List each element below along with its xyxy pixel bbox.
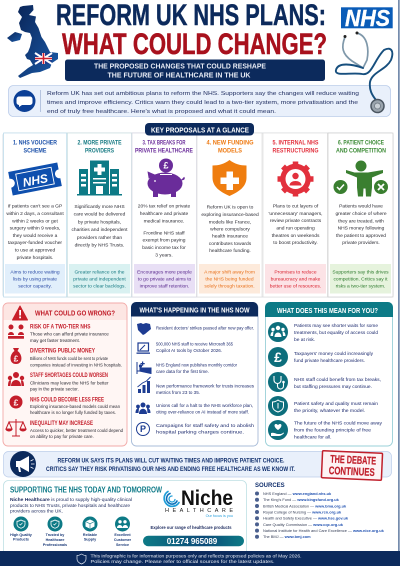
- item: free healthcare: healthcare for all.: [294, 434, 332, 440]
- footer text: Policies may change. Please refer to official sources for the latest updates.: [90, 559, 274, 564]
- callout: lists by using private: [13, 276, 57, 282]
- stamp: the debate continues: [321, 451, 383, 480]
- callout: [199, 264, 260, 294]
- icon: high quality: [10, 516, 33, 542]
- card 3: tax breaks: medical insurance.: [144, 218, 184, 224]
- panel: sources: Care Quality Commission — www.cqc.org.uk: [263, 522, 344, 527]
- subtitle banner: [65, 60, 325, 81]
- item: unions: Unions call for a halt to the NHS workforce plan,: [156, 403, 253, 408]
- item: staff shortages: STAFF SHORTAGES COULD WORSEN: [30, 373, 108, 379]
- icon: customer service: Service: [116, 543, 129, 547]
- item: money: Taxpayers' money could increasingly: [294, 351, 374, 357]
- icon: reliable supply: Reliable: [83, 533, 97, 537]
- card 3: tax breaks: healthcare and private: [140, 211, 188, 217]
- icon: NHS ticket: [8, 162, 62, 196]
- icon: trusted: [43, 516, 67, 547]
- card 6: patient choice: [328, 133, 393, 297]
- body text: Niche Healthcare is proud to supply high-quality clinical: [10, 497, 132, 502]
- icon: piggy bank with pound: £: [163, 160, 169, 170]
- item: performance framework: [138, 377, 255, 395]
- item: safety: [268, 396, 378, 416]
- text: CRITICS SAY THEY RISK PRIVATISING OUR NHS AND ENDING FREE HEALTHCARE AS WE KNOW IT.: [46, 466, 295, 473]
- callout: solely through taxation.: [204, 284, 255, 290]
- callout: competition. Critics say it: [333, 276, 388, 282]
- card 3: tax breaks: Frontline NHS staff: [143, 230, 185, 236]
- card 4: funding models: Reform UK is open to: [207, 205, 254, 211]
- phone pill: 01274 965089: [167, 537, 218, 546]
- footer text: [90, 554, 302, 564]
- card 5: restructuring: 'unnecessary' managers,: [268, 211, 323, 217]
- icon: hospital: [77, 160, 122, 196]
- item: public money: companies instead of investing in NHS hospitals.: [30, 362, 122, 368]
- item: performance framework: metrics from 23 to 35.: [156, 390, 200, 395]
- callout: better use of resources.: [270, 284, 321, 290]
- item: staff shortages: [8, 372, 109, 392]
- logo: Niche Healthcare: HEALTHCARE: [165, 508, 233, 514]
- callout: sector to clear backlogs.: [73, 284, 126, 290]
- item: inequality: [6, 419, 123, 439]
- intro text: Reform UK has set out ambitious plans to reform the NHS. Supporters say the changes will reduce waiting: [47, 91, 359, 97]
- item: public money: [11, 348, 122, 368]
- item: parking: P: [140, 424, 146, 434]
- item: less free: Exploring insurance-based models could mean: [30, 404, 120, 409]
- item: Copilot: Copilot AI tools by October 2026.: [156, 348, 222, 353]
- item: two tier: may get faster treatment.: [30, 338, 80, 343]
- item: performance framework: New performance framework for trusts increases: [156, 383, 255, 388]
- panel: sources: NHS England — www.england.nhs.uk: [263, 491, 332, 496]
- stamp: the debate continues: CONTINUES: [328, 465, 375, 479]
- item: free healthcare: from the founding principle of free: [294, 428, 371, 434]
- item: waits: treatments, but equality of access could: [294, 330, 378, 336]
- card 3: tax breaks: 3 years.: [155, 252, 173, 258]
- icon: person with tick and cross: [334, 160, 388, 196]
- card 1: NHS voucher: If patients can't see a GP: [8, 204, 62, 210]
- item: free healthcare: The future of the NHS could move away: [294, 420, 383, 426]
- card 5: restructuring: and run operating: [276, 226, 315, 232]
- card 1: NHS voucher: taxpayer-funded voucher: [8, 240, 62, 246]
- item: Copilot: [136, 342, 233, 354]
- icon: reliable supply: [82, 516, 98, 542]
- callout: private and independent: [73, 276, 126, 282]
- callout: Aims to reduce waiting: [10, 270, 60, 276]
- card 4: funding models: exploring insurance-based: [201, 212, 259, 218]
- heading: key proposals pill: [145, 123, 254, 136]
- item: staff shortages: Clinicians may leave the NHS for better: [30, 380, 109, 386]
- item: two tier: [8, 324, 109, 343]
- callout: Promises to reduce: [274, 270, 317, 276]
- body text: [10, 497, 132, 514]
- card 6: patient choice: Patients would have: [339, 204, 383, 210]
- item: parking: Campaigns for staff safety and to abolish: [156, 423, 255, 428]
- card 3: tax breaks: [132, 133, 196, 297]
- text: REFORM UK SAYS ITS PLANS WILL CUT WAITING TIMES AND IMPROVE PATIENT CHOICE.: [58, 458, 285, 464]
- panel: sources: [255, 483, 385, 539]
- item: waits: be at risk.: [294, 337, 315, 343]
- card 1: NHS voucher: within 2 days, a consultant: [6, 211, 64, 217]
- item: less free: £: [14, 398, 19, 408]
- item: money: fund private healthcare providers.: [294, 358, 365, 364]
- item: public money: DIVERTING PUBLIC MONEY: [30, 349, 95, 355]
- panel: sources: British Medical Association — www.bma.org.uk: [263, 504, 347, 508]
- item: inequality: on ability to pay for private care.: [30, 434, 94, 439]
- icon: UK map with flag: [7, 5, 58, 78]
- item: money: [268, 347, 374, 367]
- text: explore range: Explore our range of healthcare products: [150, 525, 232, 530]
- card 5: restructuring: RESTRUCTURING: [272, 148, 318, 154]
- stamp: the debate continues: THE DEBATE: [330, 454, 376, 468]
- card 5: restructuring: [263, 133, 328, 297]
- intro text: end of truly free healthcare. Here's what is proposed and what it could mean.: [47, 109, 276, 115]
- subtitle banner: THE PROPOSED CHANGES THAT COULD RESHAPE: [94, 64, 266, 70]
- heading: key proposals pill: KEY PROPOSALS AT A GLANCE: [151, 126, 249, 134]
- card 6: patient choice: private providers.: [342, 240, 380, 246]
- item: unions: [136, 402, 253, 414]
- icon: high quality: High Quality: [10, 533, 33, 537]
- card 3: tax breaks: 3. TAX BREAKS FOR: [142, 140, 186, 146]
- item: money: £: [274, 349, 282, 365]
- icon: megaphone: [10, 451, 36, 477]
- title: [56, 0, 327, 61]
- card 4: funding models: where compulsory: [210, 226, 250, 232]
- callout: the NHS being funded: [205, 276, 254, 282]
- item: staff: NHS staff could benefit from tax breaks,: [294, 377, 381, 383]
- item: Copilot: 500,000 NHS staff to receive Microsoft 365: [156, 342, 233, 346]
- card 4: funding models: healthcare funding.: [209, 248, 251, 254]
- heading: WHAT DOES THIS MEAN FOR YOU?: [277, 308, 378, 315]
- card 3: tax breaks: 20% tax relief on private: [138, 204, 191, 210]
- item: public money: Billions of NHS funds could be sent to private: [30, 356, 108, 361]
- intro text: [47, 91, 359, 115]
- card 6: patient choice: greater choice of where: [335, 211, 387, 217]
- callout: [5, 264, 65, 294]
- body text: products to NHS Trusts, private hospitals and healthcare: [10, 503, 130, 508]
- footer: [0, 551, 400, 566]
- card 4: funding models: [197, 133, 262, 297]
- card 4: funding models: models like France,: [209, 219, 251, 225]
- icon: gear with person: [278, 162, 314, 196]
- panel: sources: National Institute for Health and Care Excellence — www.nice.org.uk: [263, 528, 385, 533]
- icon: speech bubble: [14, 90, 36, 112]
- icon: trusted: Professionals: [43, 543, 67, 547]
- icon: trusted: Trusted by: [46, 533, 65, 537]
- item: staff shortages: pay in the private sector.: [30, 386, 79, 392]
- phone pill: [143, 536, 244, 546]
- heading: WHAT'S HAPPENING IN THE NHS NOW: [140, 308, 250, 314]
- icon: customer service: Customer: [114, 538, 132, 542]
- card 6: patient choice: the patient to approved: [336, 233, 386, 239]
- card 6: patient choice: AND COMPETITION: [336, 148, 386, 154]
- callout: [265, 264, 326, 294]
- item: less free: NHS COULD BECOME LESS FREE: [30, 398, 104, 404]
- item: corridor care: NHS England now publishes monthly corridor: [156, 362, 237, 368]
- item: strikes: Resident doctors' strikes paused after new pay offer.: [156, 326, 254, 330]
- logo: Niche Healthcare: [164, 487, 233, 518]
- cards background: [3, 133, 393, 297]
- card 5: restructuring: Plans to cut layers of: [273, 204, 319, 210]
- card 4: funding models: 4. NEW FUNDING: [206, 140, 254, 146]
- footer text: This infographic is for information purposes only and reflects proposed policies as of May 2026.: [90, 554, 302, 558]
- card 1: NHS voucher: they would receive a: [13, 233, 58, 239]
- card 1: NHS voucher: SCHEME: [24, 148, 47, 154]
- icon: customer service: Excellent: [114, 533, 131, 537]
- panel: sources: Health and Safety Executive — www.hse.gov.uk: [263, 516, 349, 521]
- callout: to go private and aims to: [138, 276, 192, 282]
- card 4: funding models: health insurance: [212, 234, 248, 240]
- card 6: patient choice: 6. PATIENT CHOICE: [338, 140, 384, 146]
- icon: reliable supply: Supply: [84, 538, 97, 542]
- card 1: NHS voucher: to use at approved: [15, 248, 56, 254]
- callout: Supporters say this drives: [332, 270, 389, 276]
- subtitle banner: THE FUTURE OF HEALTHCARE IN THE UK: [108, 72, 250, 80]
- item: safety: the priority, whatever the model.: [294, 408, 365, 414]
- callout: improve staff retention.: [140, 284, 189, 290]
- body text: providers across the UK.: [10, 508, 63, 514]
- panel: what does this mean: [265, 302, 393, 446]
- logo: Niche Healthcare: Niche: [181, 487, 233, 510]
- item: corridor care: care data for the first time.: [156, 369, 209, 374]
- logo: Niche Healthcare: Our focus is you: [206, 514, 233, 518]
- icon: high quality: Products: [13, 538, 29, 542]
- icon: stethoscope: [336, 32, 392, 112]
- card 6: patient choice: NHS money following: [338, 226, 385, 232]
- card 5: restructuring: 5. INTERNAL NHS: [272, 140, 319, 146]
- icon: piggy bank with pound: [148, 158, 184, 197]
- item: staff: but staffing pressures may continue.: [294, 384, 372, 390]
- callout: [134, 264, 195, 294]
- card 1: NHS voucher: [4, 133, 66, 297]
- item: unions: citing over-reliance on AI instead of more staff.: [156, 410, 249, 414]
- item: parking: [136, 422, 255, 436]
- callout: A major shift away from: [204, 270, 255, 276]
- item: public money: £: [14, 354, 19, 364]
- card 4: funding models: contributes towards: [209, 241, 252, 247]
- intro text: times and improve efficiency. Critics warn they could lead to a two-tier system, more privatisation and the: [47, 100, 358, 106]
- card 5: restructuring: review private contracts: [270, 218, 322, 224]
- card 3: tax breaks: exempt from paying: [143, 238, 186, 244]
- callout: bureaucracy and make: [271, 276, 321, 282]
- callout: [330, 264, 391, 294]
- callout: Encourages more people: [137, 270, 192, 276]
- heading: WHAT COULD GO WRONG?: [35, 308, 115, 318]
- item: free healthcare: [268, 420, 383, 440]
- panel: sources: Royal College of Nursing — www.rcn.org.uk: [263, 510, 342, 514]
- icon: customer service: [114, 516, 132, 547]
- item: inequality: INEQUALITY MAY INCREASE: [30, 421, 93, 427]
- card 1: NHS voucher: within 2 weeks or get: [12, 218, 58, 224]
- card 6: patient choice: they are treated, with: [338, 218, 384, 224]
- banner: debate: [4, 451, 392, 480]
- card 2: private providers: providers rather than: [77, 235, 122, 241]
- card 1: NHS voucher: 1. NHS VOUCHER: [13, 140, 57, 146]
- icon: shield: [77, 554, 86, 564]
- callout: Greater reliance on the: [74, 270, 125, 276]
- callout: [69, 264, 130, 294]
- item: less free: [10, 396, 120, 415]
- card 1: NHS voucher: private hospitals.: [17, 255, 53, 261]
- icon: warning triangle: [12, 306, 28, 320]
- card 2: private providers: 2. MORE PRIVATE: [78, 140, 122, 146]
- card 2: private providers: by private hospitals,: [78, 219, 121, 225]
- text: [46, 458, 295, 473]
- intro panel: [8, 86, 390, 116]
- item: waits: Patients may see shorter waits for some: [294, 323, 378, 329]
- card 2: private providers: care would be delivered: [74, 212, 126, 218]
- heading: SOURCES: [255, 483, 285, 489]
- item: waits: [268, 322, 378, 343]
- item: parking: hospital parking charges continue.: [156, 430, 244, 434]
- card 2: private providers: [68, 133, 132, 297]
- panel: what could go wrong: [3, 303, 127, 446]
- callout: risks a two-tier system.: [336, 284, 385, 290]
- callout: sector capacity.: [18, 284, 52, 290]
- item: two tier: RISK OF A TWO-TIER NHS: [30, 325, 90, 331]
- card 2: private providers: Significantly more NHS: [74, 204, 125, 210]
- item: safety: Patient safety and quality must remain: [294, 401, 378, 407]
- card 3: tax breaks: basic income tax for: [142, 245, 186, 251]
- card 3: tax breaks: PRIVATE HEALTHCARE: [135, 148, 193, 154]
- panel: what's happening: [131, 302, 258, 446]
- icon: shield with cross: [212, 160, 246, 196]
- item: corridor care: [137, 362, 237, 374]
- card 2: private providers: PROVIDERS: [85, 148, 114, 154]
- item: inequality: Access to quicker, better treatment could depend: [30, 428, 123, 433]
- card 5: restructuring: theatres on weekends: [272, 233, 320, 239]
- icon: NHS ticket: NHS: [22, 171, 49, 190]
- item: less free: healthcare is no longer fully funded by taxes.: [30, 410, 116, 415]
- heading: SUPPORTING THE NHS TODAY AND TOMORROW: [10, 486, 163, 494]
- panel: sources: The BMJ — www.bmj.com: [263, 534, 311, 539]
- card 4: funding models: MODELS: [218, 148, 243, 154]
- item: strikes: [137, 323, 254, 335]
- card 2: private providers: directly by NHS Trusts.: [75, 242, 124, 248]
- card 5: restructuring: to boost productivity.: [273, 240, 318, 246]
- icon: NHS logo: NHS: [345, 5, 391, 31]
- item: two tier: Those who can afford private insurance: [30, 332, 109, 336]
- card 1: NHS voucher: surgery within 9 weeks,: [10, 226, 60, 232]
- icon: trusted: Healthcare: [46, 538, 64, 542]
- card 2: private providers: charities and independent: [71, 227, 128, 233]
- item: staff: [268, 372, 381, 392]
- panel: supporting the NHS: [4, 480, 246, 556]
- panel: sources: The King's Fund — www.kingsfund.org.uk: [263, 497, 340, 502]
